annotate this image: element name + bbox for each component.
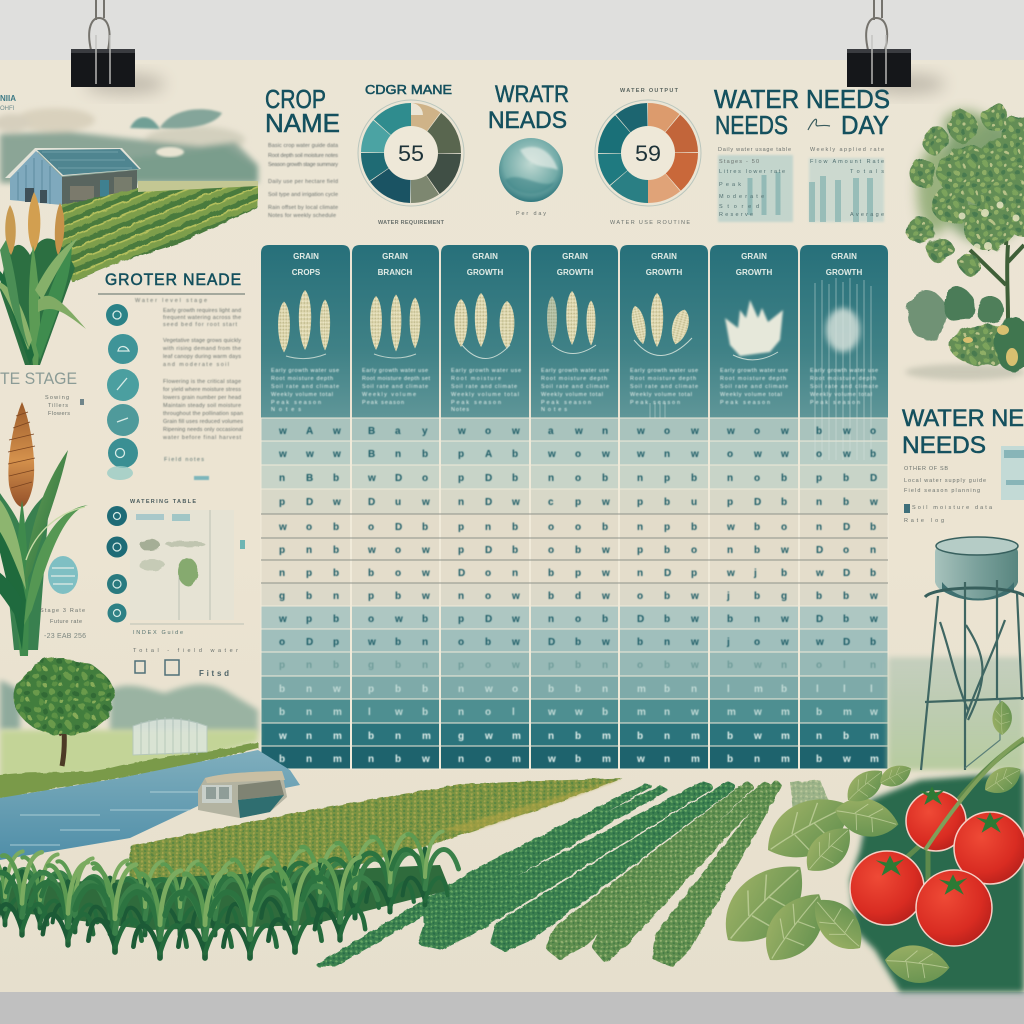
table header panel 4 [531, 245, 618, 418]
water needs heading right: WATER NE [902, 405, 1024, 432]
stage footer text: Stage 3 Rate [40, 608, 85, 614]
table header panel 4: Weekly volume total [541, 392, 603, 398]
leaves [707, 699, 1024, 994]
donut chart left [358, 100, 464, 206]
data table rows: bnmlwbnolwwbmnwmwmbmw [279, 707, 878, 718]
table header panel 1: Peak season [271, 400, 321, 406]
stage small text [45, 395, 84, 417]
crop name text block: Season growth stage summary [268, 162, 338, 168]
globe icon [499, 138, 563, 202]
water needs small block: Rate log [904, 518, 944, 524]
table header panel 5: Early growth water use [630, 368, 698, 374]
river [0, 750, 300, 860]
daily needs table left: Litres lower rate [719, 169, 785, 175]
table header panel 3: GROWTH [467, 268, 503, 277]
table header panel 3 [441, 245, 529, 418]
small distant crop patch [790, 780, 835, 825]
table header panel 7: Weekly volume total [810, 392, 872, 398]
data table rows: wnmbnmgwmnbmbnmbwmnbm [278, 731, 879, 742]
growth needs text block: seed bed for root start [163, 322, 237, 328]
stage footer text [40, 608, 86, 640]
growth needs heading: GROTER NEADE [105, 270, 242, 289]
stage small text: Tillers [48, 403, 68, 409]
dark foliage backdrop [850, 772, 1024, 992]
water tower [888, 537, 1024, 770]
daily needs table left [718, 147, 793, 222]
heading water needs [488, 81, 569, 134]
table header panel 4: GROWTH [557, 268, 593, 277]
bushes right [905, 287, 1024, 380]
calyx tops [876, 786, 1004, 895]
growth needs text block: lowers grain number per head [163, 395, 241, 401]
table header panel 7: Root moisture depth [810, 376, 876, 382]
small icons under chart: Fitsd [199, 669, 229, 678]
soft crown base [917, 111, 1024, 242]
stage oval icon [48, 556, 78, 594]
growth needs text block: Grain fill uses reduced volumes [163, 419, 243, 425]
bus [198, 771, 287, 818]
growth needs text block: Ripening needs only occasional [163, 427, 243, 433]
data table rows: bnmnbwnomwbmwnmbnmbwm [279, 754, 879, 765]
table header panel 2: GRAIN [382, 252, 408, 261]
data table rows: pnbgbnpowpbnobwbwnoln [279, 660, 876, 671]
lawn [0, 730, 258, 780]
field golden band [440, 779, 622, 832]
table header panel 3: GRAIN [472, 252, 498, 261]
table header panel 6: Root moisture depth [720, 376, 786, 382]
corner label top left: NIIA [0, 94, 16, 103]
water needs small block: Local water supply guide [904, 478, 986, 484]
plant chart panel: INDEX Guide [133, 630, 183, 636]
growth needs text block: Maintain steady soil moisture [163, 403, 241, 409]
table header panel 1: Notes [271, 407, 301, 413]
heading water needs per day: NEEDS [715, 110, 788, 140]
stems [895, 740, 1024, 880]
daily needs table right: Weekly applied rate [810, 147, 884, 153]
corn plant left [0, 402, 88, 656]
growth needs text block: frequent watering across the [163, 315, 241, 321]
growth needs text block [135, 298, 243, 480]
table header panel 2: Root moisture depth set [362, 376, 430, 382]
tomato stem over fruit [925, 738, 1024, 850]
donut chart right: 59 [635, 141, 661, 166]
data table rows: npbbowDonbpwnDpwjbwDb [279, 568, 876, 579]
corn field bottom left [0, 831, 459, 958]
table header panel 4: Notes [541, 407, 567, 413]
binder clip right [847, 0, 945, 94]
growth needs text block: Early growth requires light and [163, 308, 241, 314]
data table rows: wwwBnbpAbwowwnwowwowb [278, 449, 876, 460]
growth needs text block: and moderate soil [163, 362, 229, 368]
corner label top left [0, 94, 16, 112]
data table rows: gbnpbwnowbdwobwjbgbbw [279, 591, 878, 602]
barn [5, 148, 141, 205]
globe caption: Per day [516, 211, 546, 217]
crop name text block [268, 143, 339, 219]
daily needs table left: Reserve [719, 212, 753, 218]
heading water needs: WRATR [495, 81, 569, 108]
heading water needs per day: DAY [841, 110, 889, 140]
heading crop name: NAME [265, 108, 340, 138]
stage small text: Flowers [48, 411, 70, 417]
lower left landscape [0, 659, 300, 860]
table header panel 5: Weekly volume total [630, 392, 692, 398]
growth needs text block: throughout the pollination span [163, 411, 243, 417]
daily needs table right: Flow Amount Rate [810, 159, 884, 165]
bottom wall shadow [0, 992, 1024, 1024]
data table rows: wpbowbpDwnobDbwbnwDbw [278, 614, 878, 625]
data table rows: oDpwbnobwDbwbnwjowwDb [279, 637, 876, 648]
donut chart right [595, 100, 701, 206]
heading crop name: CROP [265, 84, 326, 114]
river bank [0, 742, 258, 798]
heading water needs: NEADS [488, 107, 567, 134]
heading water needs per day: WATER NEEDS [714, 84, 890, 114]
table header panel 3: Soil rate and climate [451, 384, 517, 390]
table header panel 7: GROWTH [826, 268, 862, 277]
data table rows: bnwpbbnwobbnmbnlmblll [279, 684, 873, 695]
stage small text: Sowing [45, 395, 69, 401]
hills [0, 680, 258, 732]
wheat plant left [0, 192, 86, 365]
data table rows: wAwBaywowawnwowwowbwo [278, 426, 876, 437]
table header panel 7: Peak season [810, 400, 860, 406]
table header panel 5: GROWTH [646, 268, 682, 277]
daily needs table right [809, 147, 884, 222]
growth needs text block: water before final harvest [162, 435, 241, 441]
small title crop name: CDGR MANE [365, 82, 452, 97]
heading water needs per day [714, 84, 890, 140]
table header panel 5: GRAIN [651, 252, 677, 261]
water needs small block: OTHER OF SB [904, 466, 948, 472]
table header panel 3: Weekly volume total [451, 392, 519, 398]
data table rows: pnbwowpDbobwpbonbwDon [279, 545, 876, 556]
second icon list [106, 506, 128, 622]
greenhouse [133, 717, 207, 755]
daily needs table right: Average [850, 212, 884, 218]
green field [130, 778, 622, 880]
table header panel 3: Root moisture [451, 376, 501, 382]
table header panel 1: Root moisture depth [271, 376, 333, 382]
table header panel 2: Peak season [362, 400, 404, 406]
table header panel 5: Root moisture depth [630, 376, 696, 382]
daily needs table right: Totals [850, 169, 884, 175]
water needs heading right [902, 405, 1024, 459]
tomatoes [850, 791, 1024, 946]
donut chart left: 55 [398, 141, 424, 166]
table header panel 7: GRAIN [831, 252, 857, 261]
table header panel 4: Soil rate and climate [541, 384, 609, 390]
heading crop name [265, 84, 340, 138]
data table rows: woboDbpnboobnpbwbonDb [278, 522, 876, 533]
table header panel 2: Soil rate and climate [362, 384, 428, 390]
water needs heading right: NEEDS [902, 432, 986, 459]
plant chart panel [130, 499, 245, 654]
table header panel 1: CROPS [292, 268, 321, 277]
table header panel 3: Peak season [451, 400, 501, 406]
table header panel 1: GRAIN [293, 252, 319, 261]
thin dark crop rows [318, 785, 666, 965]
binder clip left [71, 0, 165, 94]
table header panel 2: BRANCH [378, 268, 413, 277]
water needs small block: Field season planning [904, 488, 980, 494]
round tree [14, 659, 114, 766]
daily needs table left: Peak [719, 182, 741, 188]
table header panel 3: Early growth water use [451, 368, 521, 374]
growth needs text block: for yield where moisture stress [163, 387, 241, 393]
plant chart panel: Total - field water [133, 648, 238, 654]
crop name text block: Basic crop water guide data [268, 143, 339, 149]
table header panel 6: Weekly volume total [720, 392, 782, 398]
crop rows center [422, 784, 778, 963]
table header panel 4: GRAIN [562, 252, 588, 261]
data table rows: nBbwDopDbnobnpbnobpbD [279, 473, 877, 484]
table header panel 4: Early growth water use [541, 368, 609, 374]
table header panel 4: Peak season [541, 400, 591, 406]
table header panel 6 [710, 245, 798, 418]
daily needs table left: Stored [719, 204, 759, 210]
donut right caption: WATER USE ROUTINE [610, 220, 690, 226]
field horizon [138, 181, 258, 192]
crop name text block: Rain offset by local climate [268, 205, 338, 211]
crop name text block: Daily use per hectare field [268, 179, 338, 185]
donut left caption: WATER REQUIREMENT [378, 220, 445, 226]
crop name text block: Soil type and irrigation cycle [268, 192, 338, 198]
table header panel 7: Early growth water use [810, 368, 878, 374]
water needs small block [904, 446, 1024, 524]
data table rows: pDwDuwnDwcpwpbupDbnbw [279, 497, 878, 508]
table header panel 5 [620, 245, 708, 445]
table header panel 7 [800, 245, 888, 418]
crop name text block: Root depth soil moisture notes [268, 153, 338, 159]
table header panel 6: Early growth water use [720, 368, 788, 374]
table header panel 7: Soil rate and climate [810, 384, 878, 390]
table header panel 1: Early growth water use [271, 368, 339, 374]
table header panel 1 [261, 245, 350, 418]
table header panel 5: Soil rate and climate [630, 384, 698, 390]
stage icons list [106, 304, 139, 480]
daily needs table left: Daily water usage table [718, 147, 791, 153]
stage label: TE STAGE [0, 369, 77, 388]
daily needs table left: Stages - 50 [719, 159, 759, 165]
small icons under chart [135, 660, 229, 678]
growth needs text block: leaf canopy during warm days [163, 354, 241, 360]
tomato plant [707, 699, 1024, 994]
table header panel 1: Soil rate and climate [271, 384, 339, 390]
growth needs text block: Field notes [164, 457, 204, 463]
growth needs text block: Water level stage [135, 298, 207, 304]
water needs small block: Soil moisture data [912, 505, 993, 511]
table header panel 5: Peak season [630, 400, 680, 406]
table header panel 6: GROWTH [736, 268, 772, 277]
table header panel 4: Root moisture depth [541, 376, 607, 382]
stage footer text: -23 EAB 256 [44, 633, 86, 640]
small title second donut: WATER OUTPUT [620, 88, 679, 94]
tree top right [906, 103, 1024, 320]
data table rows [261, 278, 888, 769]
table header panel 1: Weekly volume total [271, 392, 333, 398]
table header panel 6: Peak season [720, 400, 770, 406]
daily needs table left: Moderate [719, 194, 764, 200]
plant chart panel: WATERING TABLE [130, 499, 196, 505]
field rows [60, 183, 258, 282]
stage footer text: Future rate [50, 619, 82, 625]
clouds and hills [0, 108, 258, 183]
table header panel 2 [352, 245, 439, 418]
foliage clumps [906, 103, 1024, 275]
growth needs text block: with rising demand from the [162, 346, 241, 352]
growth needs text block: Flowering is the critical stage [163, 379, 241, 385]
table header panel 6: GRAIN [741, 252, 767, 261]
growth needs text block: Vegetative stage grows quickly [163, 338, 241, 344]
table header panel 2: Weekly volume [362, 392, 416, 398]
corner label top left: OHFI [0, 106, 15, 112]
table header panel 6: Soil rate and climate [720, 384, 788, 390]
farm scene top left [0, 108, 258, 282]
crop name text block: Notes for weekly schedule [268, 213, 336, 219]
table header panel 3: Notes [451, 407, 469, 413]
table header panel 2: Early growth water use [362, 368, 428, 374]
